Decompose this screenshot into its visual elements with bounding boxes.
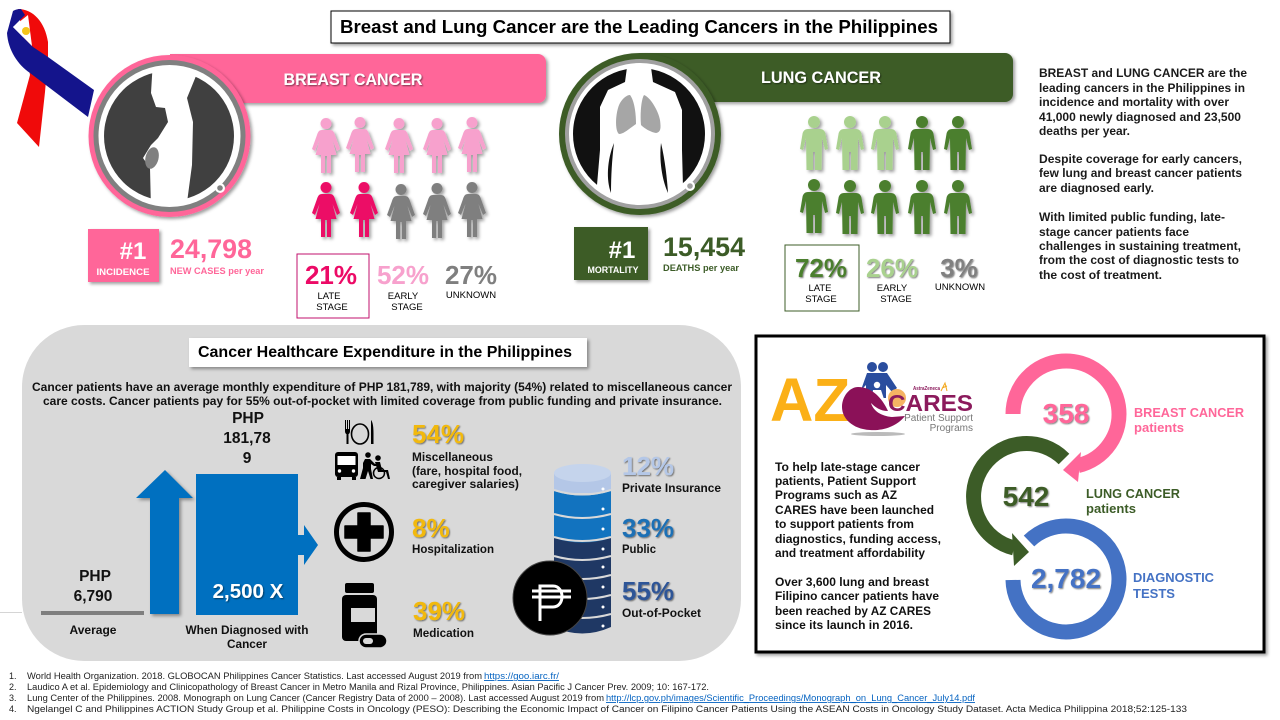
- stat: early stage 52%: STAGE: [391, 302, 423, 313]
- bar: average expenditure: [41, 568, 144, 637]
- bar: average expenditure: 6,790: [74, 588, 112, 605]
- logo: AZ CARES: [770, 362, 973, 436]
- banner: lung cancer: [640, 53, 1013, 102]
- stat: out-of-pocket 55%: 55%: [622, 576, 674, 606]
- ring: lung cancer patients: 542: [1003, 481, 1049, 512]
- ring: diagnostic tests: DIAGNOSTIC: [1133, 570, 1215, 585]
- stat: public 33%: 33%: [622, 513, 674, 543]
- stat: new cases: NEW CASES per year: [170, 266, 265, 276]
- stat: late stage 72%: 72%: [795, 253, 847, 283]
- stat: miscellaneous 54%: (fare, hospital food,: [412, 466, 522, 478]
- text block: program description: Programs such as AZ: [775, 488, 897, 502]
- text block: summary: 41,000 newly diagnosed and 23,500: [1039, 110, 1241, 124]
- ring: breast cancer patients: patients: [1134, 420, 1184, 435]
- stat: private insurance 12%: 12%: [622, 451, 674, 481]
- stat: new cases: 24,798: [170, 234, 252, 264]
- stat: hospitalization 8%: [412, 513, 494, 556]
- panel background: [22, 325, 741, 661]
- icon: lung silhouette circle: [559, 53, 721, 215]
- stat: late stage 21%: 21%: [305, 260, 357, 290]
- ring: diagnostic tests: 2,782: [1031, 563, 1101, 594]
- stat: deaths: 15,454: [663, 232, 745, 262]
- stat: early stage 26%: STAGE: [880, 294, 912, 305]
- stat: new cases: [170, 234, 265, 276]
- stat: early stage 26%: [866, 253, 918, 305]
- icon: Philippine flag ribbon: [7, 9, 94, 147]
- icon: meal: [345, 420, 374, 444]
- text block: summary: Despite coverage for early cancers,: [1039, 152, 1242, 166]
- text block: program description: To help late-stage cancer: [775, 460, 920, 474]
- references: 1.: [9, 671, 17, 681]
- stat: incidence rank: [88, 229, 159, 282]
- stat: mortality rank: MORTALITY: [588, 265, 638, 275]
- stat: public 33%: Public: [622, 544, 657, 556]
- stat: early stage 52%: EARLY: [388, 291, 419, 302]
- text block: program description: since its launch in 2016.: [775, 618, 913, 632]
- stat: unknown 27%: UNKNOWN: [446, 290, 496, 301]
- pictogram: breast cancer stage figures: [312, 117, 486, 239]
- icon: medical cross: [336, 504, 392, 560]
- stat: medication 39%: Medication: [413, 628, 474, 640]
- references: 4.: [9, 704, 17, 714]
- stat: public 33%: [622, 513, 674, 556]
- heading: expenditure: Cancer Healthcare Expenditure in the Philippines: [198, 344, 572, 361]
- panel background: [756, 336, 1264, 652]
- title: [331, 11, 950, 43]
- ring: lung cancer patients: [974, 444, 1181, 566]
- text block: expenditure summary: [32, 380, 732, 408]
- text block: program description: [775, 460, 941, 632]
- banner: breast cancer: [170, 54, 546, 103]
- panel: healthcare expenditure: [22, 325, 741, 661]
- icon: peso coin: [513, 561, 587, 635]
- bar: average expenditure: Average: [70, 625, 116, 637]
- stat: miscellaneous 54%: 54%: [412, 419, 464, 449]
- ring: diagnostic tests: [1013, 526, 1215, 632]
- logo: AZ CARES: Programs: [930, 423, 973, 434]
- chart: funding source stack: [554, 464, 611, 634]
- stat: deaths: DEATHS per year: [663, 263, 740, 273]
- references: https://goo.iarc.fr/: [484, 671, 560, 681]
- text block: summary: from the cost of diagnostic tests to: [1039, 253, 1239, 267]
- logo: AZ CARES: AZ: [770, 366, 850, 434]
- stat: late stage 21%: [297, 254, 369, 318]
- stat: mortality rank: [574, 227, 648, 280]
- ring: breast cancer patients: [1013, 361, 1245, 482]
- text block: program description: and treatment affordability: [775, 546, 925, 560]
- references: 2.: [9, 682, 17, 692]
- bar: expenditure when diagnosed: 9: [243, 450, 252, 467]
- logo: AZ CARES: Patient Support: [904, 413, 973, 424]
- icon: breast silhouette circle: [88, 55, 250, 217]
- references: http://lcp.gov.ph/images/Scientific_Proceedings/Monograph_on_Lung_Cancer_July14.pdf: [606, 693, 976, 703]
- icon: medicine bottle: [342, 583, 387, 648]
- text block: summary: the cost of treatment.: [1039, 268, 1162, 282]
- panel: AZ CARES: [756, 336, 1264, 652]
- stat: unknown 3%: UNKNOWN: [935, 282, 985, 293]
- text block: program description: Filipino cancer patients have: [775, 589, 939, 603]
- stat: out-of-pocket 55%: [622, 576, 701, 620]
- arrow: increase: [136, 470, 193, 614]
- text block: summary: leading cancers in the Philippines in: [1039, 81, 1245, 95]
- text block: program description: Over 3,600 lung and breast: [775, 575, 929, 589]
- logo: AZ CARES: AstraZeneca: [913, 386, 941, 392]
- references: [9, 671, 1187, 714]
- stat: hospitalization 8%: 8%: [412, 513, 450, 543]
- stat: incidence rank: #1: [120, 238, 146, 265]
- arrow: to cost breakdown: [298, 525, 318, 565]
- banner: breast cancer: BREAST CANCER: [284, 70, 422, 89]
- text block: expenditure summary: Cancer patients have an average monthly expenditure of PHP 181,789, with majority (54%) related to miscellaneous cancer: [32, 380, 732, 394]
- stat: late stage 72%: STAGE: [805, 294, 837, 305]
- icon: bus and caregiver: [335, 452, 390, 480]
- stat: late stage 72%: [785, 245, 859, 311]
- bar: expenditure when diagnosed: When Diagnosed with: [186, 625, 308, 637]
- stat: out-of-pocket 55%: Out-of-Pocket: [622, 608, 701, 620]
- bar: expenditure when diagnosed: PHP: [232, 410, 264, 427]
- stat: late stage 72%: LATE: [808, 283, 832, 294]
- text block: summary: deaths per year.: [1039, 124, 1130, 138]
- ring: lung cancer patients: patients: [1086, 501, 1136, 516]
- ring: diagnostic tests: TESTS: [1133, 586, 1175, 601]
- stat: medication 39%: 39%: [413, 596, 465, 626]
- stat: hospitalization 8%: Hospitalization: [412, 544, 494, 556]
- stat: early stage 26%: 26%: [866, 253, 918, 283]
- title: Breast and Lung Cancer are the Leading Cancers in the Philippines: [340, 17, 938, 37]
- text block: summary: BREAST and LUNG CANCER are the: [1039, 66, 1247, 80]
- stat: early stage 52%: 52%: [377, 260, 429, 290]
- text block: program description: been reached by AZ CARES: [775, 604, 931, 618]
- text block: program description: diagnostics, funding access,: [775, 532, 941, 546]
- stat: private insurance 12%: Private Insurance: [622, 483, 721, 495]
- text block: program description: patients, Patient Support: [775, 474, 916, 488]
- text block: summary: stage cancer patients face: [1039, 225, 1189, 239]
- bar: expenditure when diagnosed: Cancer: [227, 639, 268, 651]
- heading: expenditure: [189, 338, 587, 367]
- stat: unknown 3%: 3%: [940, 253, 978, 283]
- banner: lung cancer: LUNG CANCER: [761, 68, 881, 87]
- stat: early stage 52%: [377, 260, 429, 313]
- stat: unknown 3%: [935, 253, 985, 293]
- ring: breast cancer patients: 358: [1043, 398, 1089, 429]
- panel: breast cancer: [88, 54, 546, 318]
- stat: early stage 26%: EARLY: [877, 283, 908, 294]
- stat: late stage 21%: STAGE: [316, 302, 348, 313]
- stat: incidence rank: INCIDENCE: [96, 267, 150, 277]
- text block: summary: [1039, 66, 1247, 282]
- references: World Health Organization. 2018. GLOBOCAN Philippines Cancer Statistics. Last accessed August 2019 from: [27, 671, 482, 681]
- text block: program description: to support patients from: [775, 517, 914, 531]
- ring: lung cancer patients: LUNG CANCER: [1086, 486, 1181, 501]
- text block: summary: incidence and mortality with over: [1039, 95, 1229, 109]
- stat: late stage 21%: LATE: [317, 291, 341, 302]
- ring: breast cancer patients: BREAST CANCER: [1134, 405, 1245, 420]
- pictogram: lung cancer stage figures: [800, 116, 972, 234]
- bar: expenditure when diagnosed: [186, 410, 308, 651]
- bar: expenditure when diagnosed: 181,78: [223, 430, 271, 447]
- references: Lung Center of the Philippines. 2008. Monograph on Lung Cancer (Cancer Registry Data of 2000 – 2008). Last accessed August 2019 from: [27, 693, 604, 703]
- text block: program description: CARES have been launched: [775, 503, 934, 517]
- stat: medication 39%: [413, 596, 474, 640]
- bar: expenditure when diagnosed: 2,500 X: [213, 580, 284, 603]
- stat: private insurance 12%: [622, 451, 721, 495]
- panel: lung cancer: [559, 53, 1013, 311]
- stat: mortality rank: #1: [609, 237, 635, 264]
- references: Ngelangel C and Philippines ACTION Study Group et al. Philippine Costs in Oncology (PESO): Describing the Economic Impact of Cancer on Filipino Cancer Patients Using the ASEAN Costs in Oncology Study Dataset. Acta Medica Philippina 2018;52:125-133: [27, 704, 1187, 714]
- text block: summary: With limited public funding, late-: [1039, 210, 1225, 224]
- stat: miscellaneous 54%: Miscellaneous: [412, 452, 493, 464]
- stat: miscellaneous 54%: caregiver salaries): [412, 479, 519, 491]
- text block: summary: challenges in sustaining treatment,: [1039, 239, 1241, 253]
- bar: average expenditure: PHP: [79, 568, 111, 585]
- references: Laudico A et al. Epidemiology and Clinicopathology of Breast Cancer in Metro Manila and Rizal Province, Philippines. Asian Pacific J Cancer Prev. 2009; 10: 167-172.: [27, 682, 709, 692]
- text block: expenditure summary: care costs. Cancer patients pay for 55% out-of-pocket with limited coverage from public funding and private insurance.: [43, 394, 722, 408]
- stat: unknown 27%: 27%: [445, 260, 497, 290]
- text block: summary: few lung and breast cancer patients: [1039, 166, 1242, 180]
- references: 3.: [9, 693, 17, 703]
- text block: summary: are diagnosed early.: [1039, 181, 1154, 195]
- stat: miscellaneous 54%: [412, 419, 522, 491]
- logo: AZ CARES: CARES: [888, 390, 973, 416]
